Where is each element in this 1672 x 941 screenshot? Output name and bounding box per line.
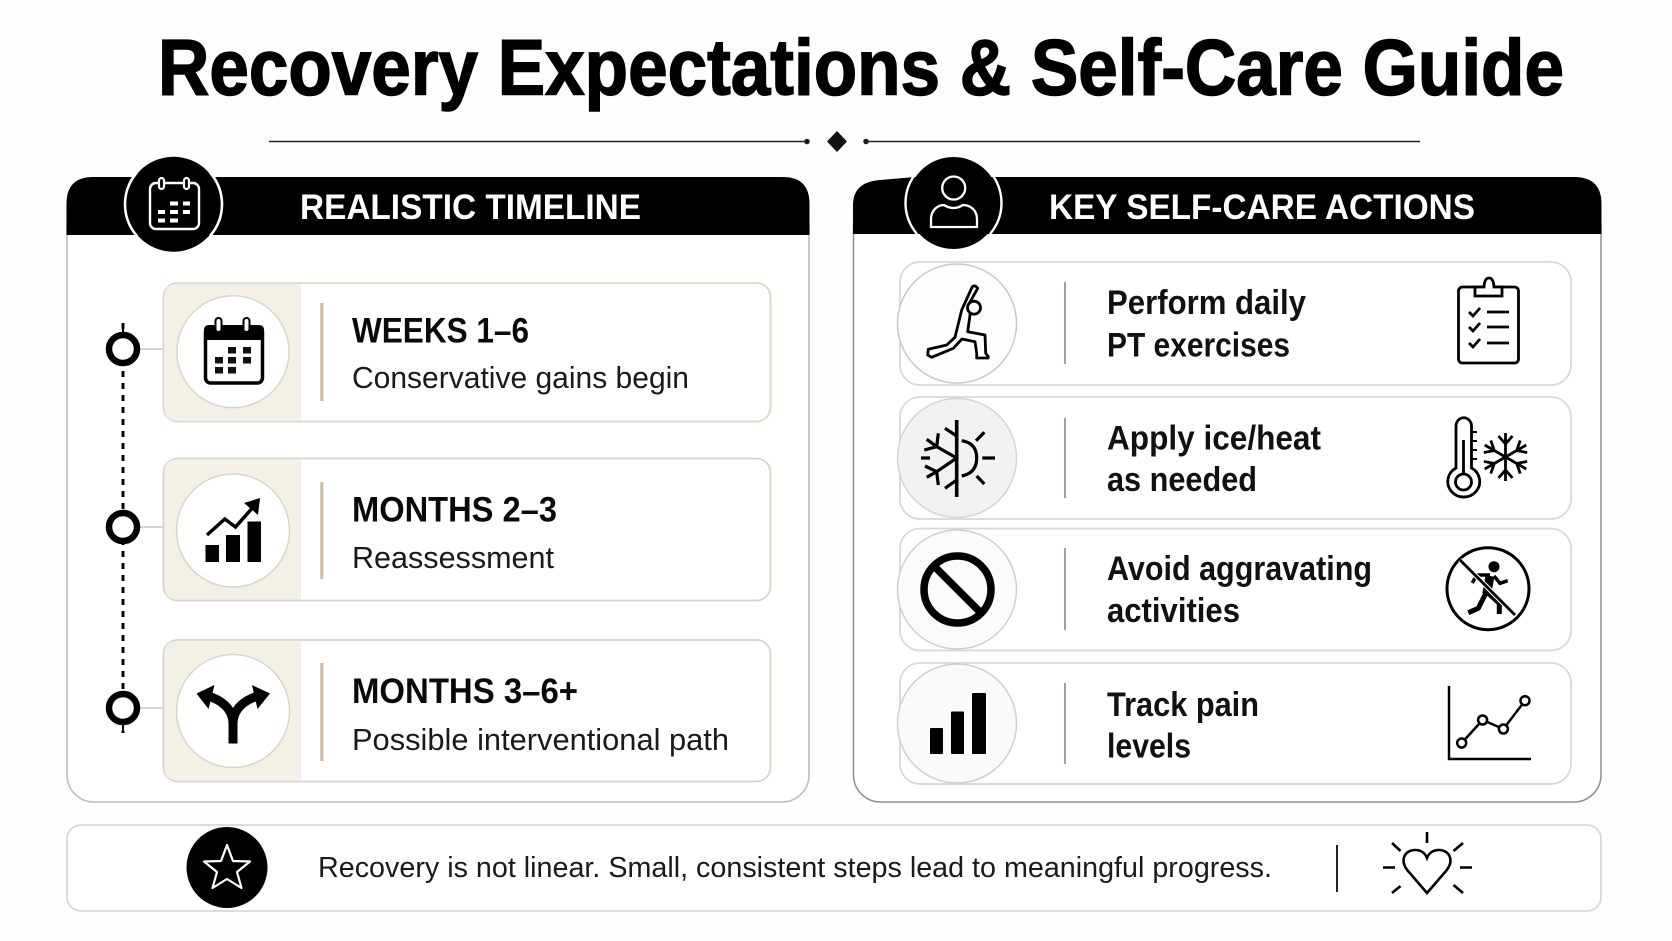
- heading: key self-care actions: KEY SELF-CARE ACTIONS: [1049, 188, 1475, 227]
- panel: key self-care actions: [853, 157, 1602, 802]
- card heading: MONTHS 2–3: [352, 490, 557, 530]
- icon: glowing heart: [1383, 832, 1472, 893]
- footer callout: [67, 825, 1601, 911]
- action text: Perform daily: [1107, 284, 1306, 322]
- icon: header person badge: [906, 157, 1002, 249]
- action text: activities: [1107, 592, 1240, 630]
- icon: half snowflake half sun: [921, 420, 995, 497]
- icon: star badge: [186, 827, 268, 908]
- icon: lunge stretch: [928, 286, 988, 358]
- action text: Track pain: [1107, 686, 1259, 724]
- action row: apply ice/heat: [898, 397, 1571, 519]
- action text: PT exercises: [1107, 326, 1290, 364]
- icon: line chart: [1449, 686, 1531, 759]
- card description: Reassessment: [352, 540, 554, 575]
- action text: Avoid aggravating: [1107, 550, 1372, 588]
- icon: no running: [1447, 548, 1529, 630]
- action text: as needed: [1107, 461, 1257, 499]
- action row: perform daily PT exercises: [898, 262, 1571, 385]
- footer message: Recovery is not linear. Small, consistent steps lead to meaningful progress.: [318, 852, 1272, 884]
- card description: Conservative gains begin: [352, 360, 689, 395]
- panel header: key self-care actions: [853, 177, 1602, 234]
- icon: branching path arrows: [196, 685, 270, 744]
- icon: header calendar badge: [125, 157, 222, 252]
- panel header: realistic timeline: [66, 177, 810, 235]
- title: Recovery Expectations & Self-Care Guide: [158, 24, 1564, 112]
- timeline track: [109, 323, 164, 733]
- title divider: [269, 131, 1420, 152]
- card heading: MONTHS 3–6+: [352, 672, 578, 711]
- icon: rising chart: [206, 498, 261, 562]
- timeline card: months 3-6+: [164, 640, 770, 782]
- card heading: WEEKS 1–6: [352, 312, 529, 350]
- icon: clipboard checklist: [1458, 278, 1518, 363]
- heading: realistic timeline: REALISTIC TIMELINE: [300, 188, 641, 227]
- card description: Possible interventional path: [352, 722, 729, 757]
- icon: signal bars: [930, 693, 986, 754]
- icon: prohibition sign: [924, 556, 991, 623]
- icon: calendar: [204, 318, 264, 383]
- icon: thermometer and snowflake: [1448, 418, 1530, 497]
- panel: realistic timeline: [66, 157, 810, 802]
- action row: track pain levels: [898, 663, 1571, 784]
- timeline card: months 2-3: [164, 458, 770, 600]
- timeline card: weeks 1-6: [164, 283, 770, 422]
- action text: Apply ice/heat: [1107, 420, 1321, 458]
- action text: levels: [1107, 728, 1191, 766]
- action row: avoid aggravating activities: [898, 528, 1571, 650]
